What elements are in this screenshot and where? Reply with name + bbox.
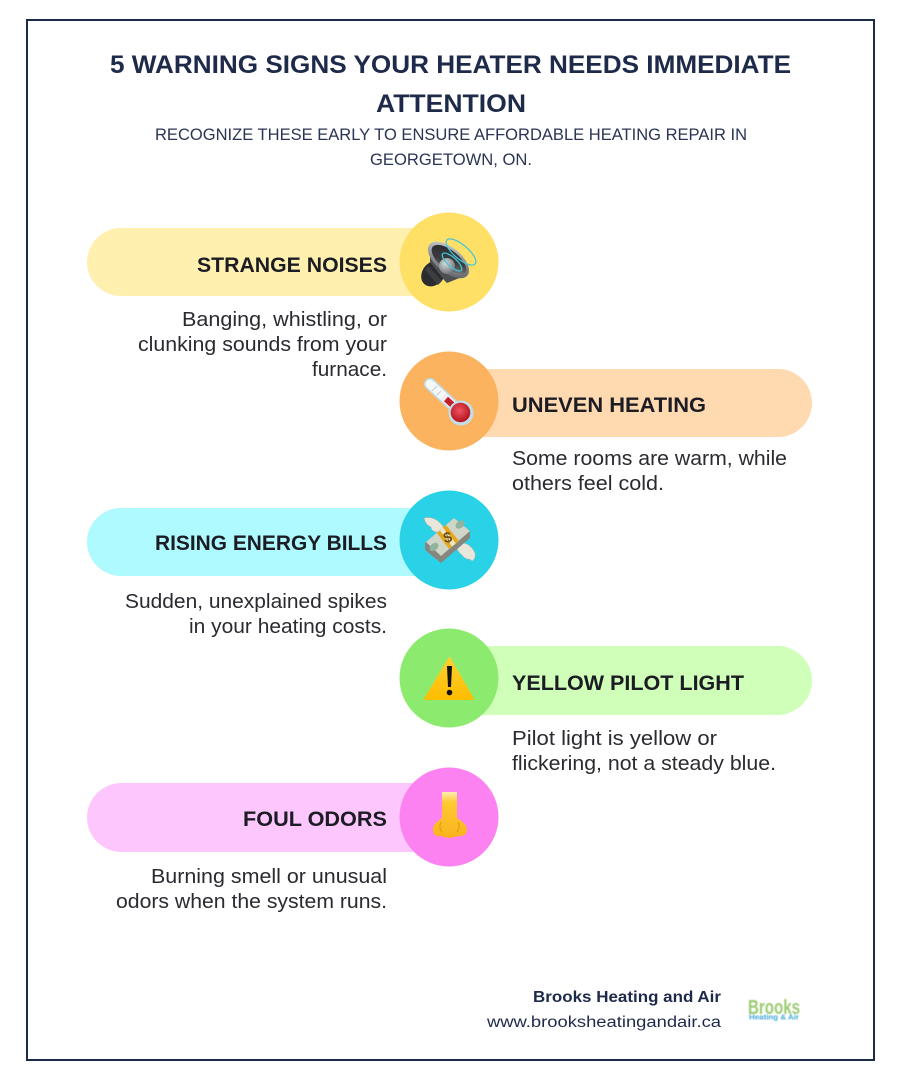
description: foul odors: Burning smell or unusual	[151, 866, 387, 888]
description: foul odors: odors when the system runs.	[116, 891, 387, 913]
description: uneven heating: others feel cold.	[512, 473, 664, 495]
description: yellow pilot light	[512, 728, 776, 775]
description: foul odors	[116, 866, 387, 913]
heading pill: yellow pilot light: YELLOW PILOT LIGHT	[512, 672, 744, 695]
description: strange noises	[138, 309, 387, 381]
icon circle: nose	[400, 768, 498, 866]
description: rising energy bills	[125, 591, 387, 638]
heading pill: rising energy bills: RISING ENERGY BILLS	[155, 532, 387, 555]
description: uneven heating: Some rooms are warm, while	[512, 448, 787, 470]
heading pill: strange noises	[87, 228, 457, 296]
description: rising energy bills: in your heating costs.	[189, 616, 387, 638]
heading pill: strange noises: STRANGE NOISES	[197, 254, 387, 277]
subtitle: GEORGETOWN, ON.	[370, 151, 532, 169]
heading pill: uneven heating	[445, 369, 812, 437]
description: yellow pilot light: flickering, not a steady blue.	[512, 753, 776, 775]
icon circle: money with wings: $	[442, 529, 455, 547]
description: strange noises: clunking sounds from your	[138, 334, 387, 356]
heading pill: rising energy bills	[87, 508, 457, 576]
footer: company name and website: Brooks Heating and Air	[533, 989, 721, 1006]
panel: uneven heating	[400, 352, 812, 495]
description: yellow pilot light: Pilot light is yellow or	[512, 728, 717, 750]
icon circle: money with wings	[400, 490, 498, 590]
heading pill: uneven heating: UNEVEN HEATING	[512, 394, 706, 417]
footer: company name and website: www.brooksheatingandair.ca	[486, 1014, 721, 1031]
description: uneven heating	[512, 448, 787, 495]
description: rising energy bills: Sudden, unexplained spikes	[125, 591, 387, 613]
logo: Brooks: Heating & Air	[749, 1014, 799, 1022]
description: strange noises: furnace.	[312, 359, 387, 381]
subtitle	[155, 126, 747, 169]
logo: Brooks	[748, 997, 800, 1022]
title: ATTENTION	[376, 90, 526, 118]
title: 5 WARNING SIGNS YOUR HEATER NEEDS IMMEDIATE	[110, 51, 791, 79]
icon circle: thermometer	[400, 352, 498, 450]
panel: strange noises	[87, 212, 498, 381]
subtitle: RECOGNIZE THESE EARLY TO ENSURE AFFORDABLE HEATING REPAIR IN	[155, 126, 747, 144]
icon circle: warning sign	[400, 628, 498, 728]
heading pill: foul odors: FOUL ODORS	[243, 808, 387, 831]
title	[110, 51, 791, 118]
heading pill: yellow pilot light	[445, 646, 812, 715]
heading pill: foul odors	[87, 783, 457, 852]
panel: foul odors	[87, 768, 498, 913]
description: strange noises: Banging, whistling, or	[182, 309, 387, 331]
footer: company name and website	[486, 989, 721, 1031]
panel: yellow pilot light	[400, 628, 812, 775]
panel: rising energy bills	[87, 490, 498, 638]
icon circle: speaker	[400, 212, 498, 312]
logo: Brooks: Brooks	[748, 997, 800, 1019]
